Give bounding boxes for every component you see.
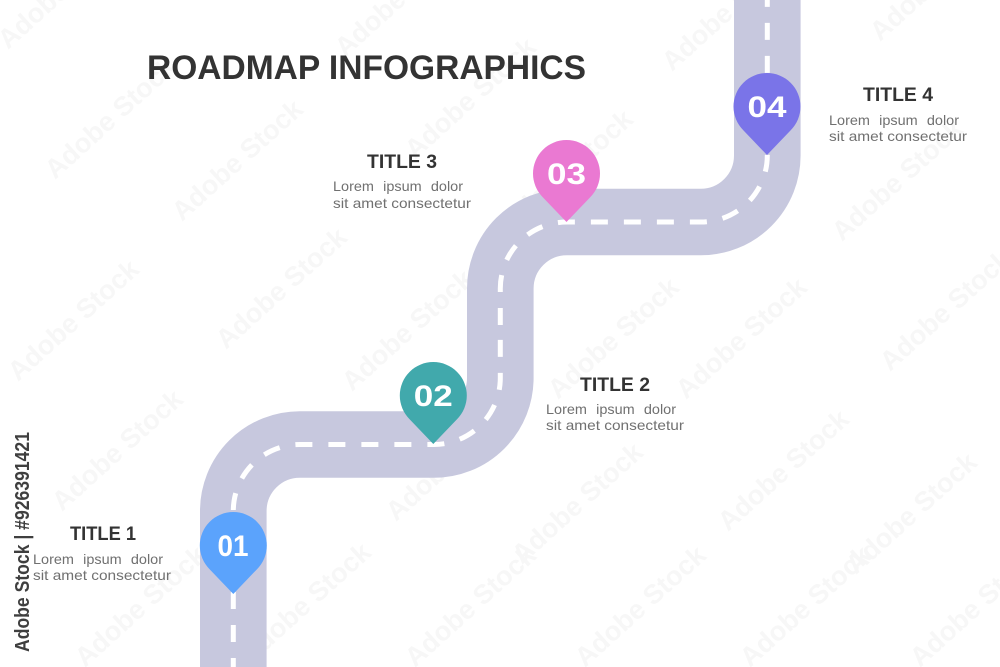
text block: title 4: sit amet consectetur bbox=[829, 128, 967, 144]
text block: title 1 bbox=[33, 523, 171, 583]
pin 04: 04 bbox=[748, 91, 787, 124]
road bbox=[233, 0, 767, 667]
watermark pattern: Adobe Stock bbox=[380, 393, 523, 526]
text block: title 3 bbox=[333, 151, 471, 211]
text block: title 1: Lorem ipsum dolor bbox=[33, 551, 163, 567]
watermark pattern: Adobe Stock bbox=[506, 436, 649, 569]
watermark pattern: Adobe Stock bbox=[496, 103, 639, 236]
pin 03 bbox=[533, 140, 600, 222]
text block: title 1: TITLE 1 bbox=[70, 523, 136, 545]
road centre dashes bbox=[233, 0, 767, 667]
watermark pattern: Adobe Stock bbox=[46, 383, 189, 516]
watermark pattern: Adobe Stock bbox=[39, 51, 182, 184]
watermark pattern: Adobe Stock bbox=[166, 93, 309, 226]
pin 01 bbox=[200, 512, 267, 594]
watermark pattern: Adobe Stock bbox=[2, 253, 145, 386]
pin 04 bbox=[734, 73, 800, 155]
pin 01: 01 bbox=[218, 530, 248, 563]
pin 02 bbox=[400, 362, 467, 444]
watermark pattern: Adobe Stock bbox=[210, 221, 353, 354]
text block: title 2: sit amet consectetur bbox=[546, 417, 684, 433]
watermark pattern: Adobe Stock bbox=[826, 113, 969, 246]
text block: title 3: TITLE 3 bbox=[367, 151, 437, 173]
text block: title 1: sit amet consectetur bbox=[33, 567, 171, 583]
watermark pattern: Adobe Stock bbox=[712, 403, 855, 536]
watermark pattern: Adobe Stock bbox=[542, 271, 685, 404]
text block: title 2 bbox=[546, 374, 684, 433]
watermark pattern: Adobe Stock bbox=[840, 446, 983, 579]
pin 02: 02 bbox=[414, 380, 453, 413]
watermark pattern: Adobe Stock bbox=[670, 271, 813, 404]
text block: title 4: TITLE 4 bbox=[863, 84, 933, 106]
text block: title 2: Lorem ipsum dolor bbox=[546, 401, 676, 417]
pin 03: 03 bbox=[547, 158, 586, 191]
stock credit: Adobe Stock | #926391421 bbox=[12, 432, 34, 652]
watermark pattern: Adobe Stock bbox=[399, 31, 542, 164]
text block: title 2: TITLE 2 bbox=[580, 374, 650, 396]
watermark pattern: Adobe Stock bbox=[336, 263, 479, 396]
text block: title 4: Lorem ipsum dolor bbox=[829, 112, 959, 128]
text block: title 3: Lorem ipsum dolor bbox=[333, 178, 463, 194]
text block: title 3: sit amet consectetur bbox=[333, 195, 471, 211]
watermark pattern: Adobe Stock bbox=[234, 536, 377, 667]
text block: title 4 bbox=[829, 84, 967, 144]
heading: ROADMAP INFOGRAPHICS bbox=[147, 49, 586, 87]
